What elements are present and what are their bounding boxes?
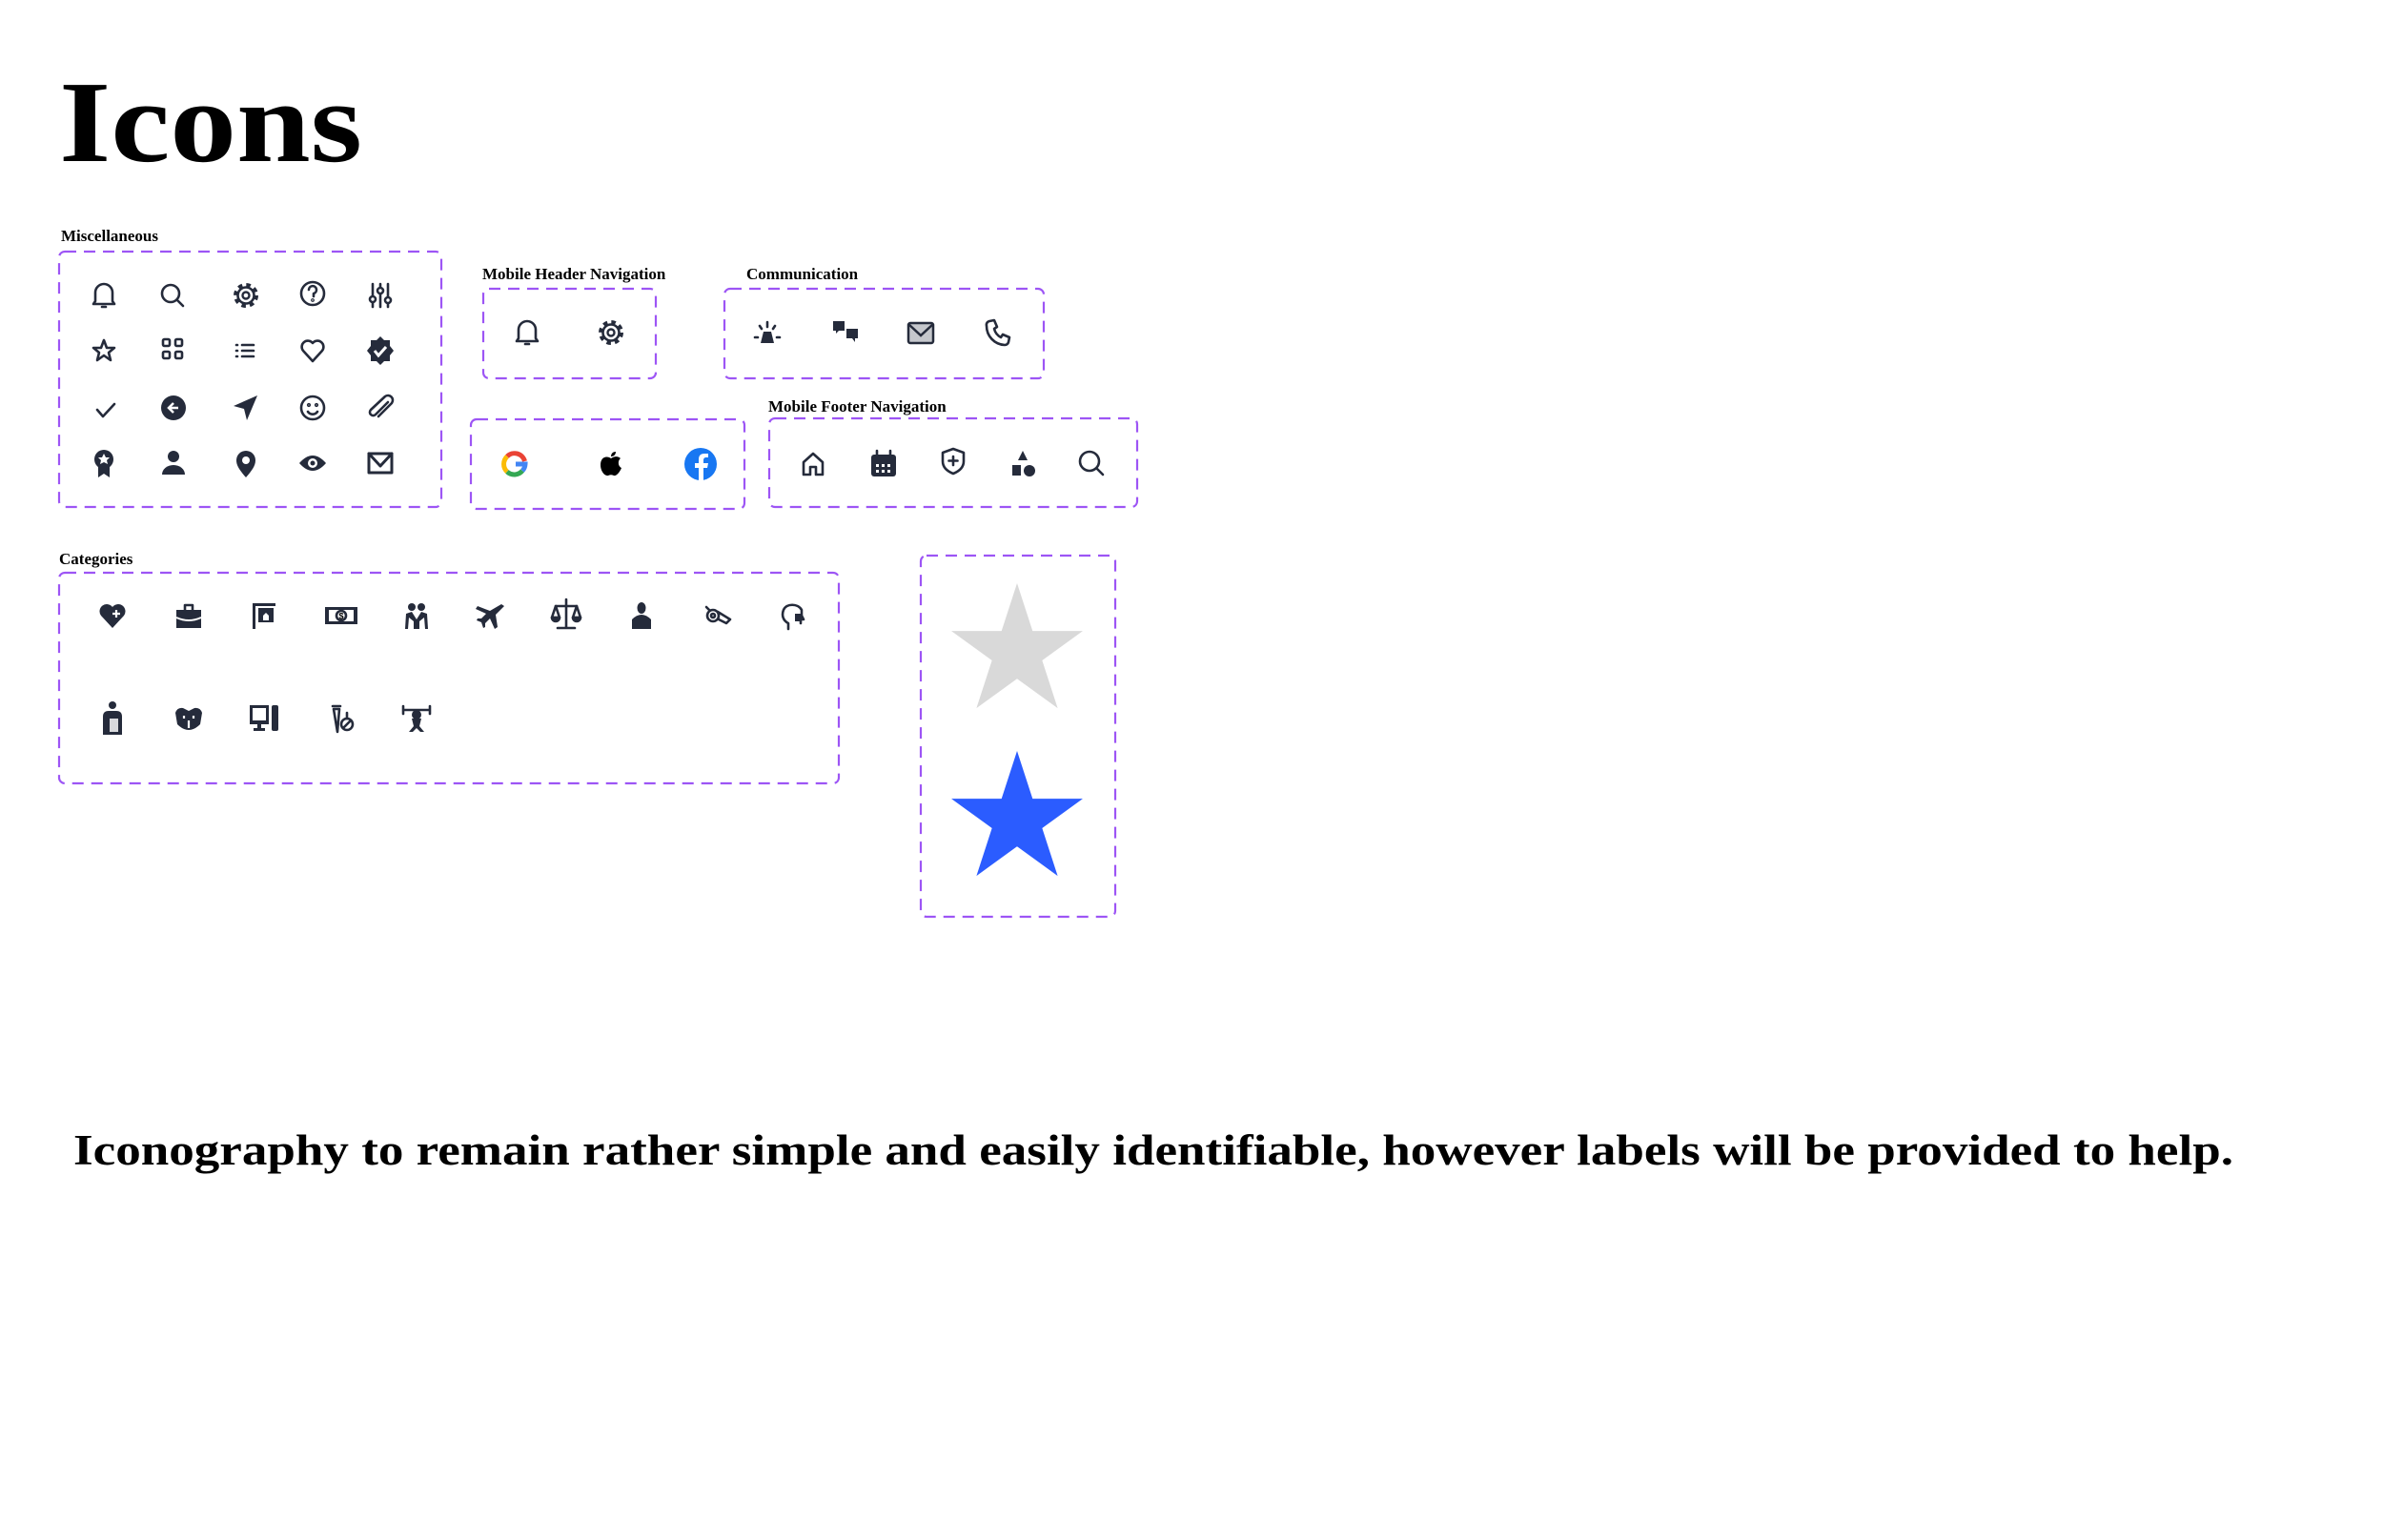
icon: mail — [369, 454, 392, 473]
icon: check — [97, 404, 114, 416]
icon: apple — [601, 452, 621, 476]
icon: phone — [987, 320, 1009, 345]
icon: paperclip — [370, 395, 393, 416]
icon: calendar — [871, 451, 896, 476]
icon: help — [301, 282, 324, 305]
icon: blue star — [951, 751, 1083, 876]
icon: envelope — [908, 323, 933, 343]
icon: chat — [833, 321, 858, 342]
panel: communication — [724, 265, 1044, 378]
title: Icons — [59, 58, 362, 187]
icon: shield — [943, 449, 964, 474]
icon: home — [804, 454, 823, 475]
icon: computer — [250, 705, 278, 731]
icon: list — [236, 345, 254, 356]
icon: grid — [163, 339, 182, 358]
panel: miscellaneous — [59, 227, 441, 507]
icon: verified badge — [367, 336, 394, 365]
icon: facebook — [684, 448, 717, 480]
icon: search — [162, 285, 183, 306]
icon: briefcase — [176, 605, 201, 628]
icon: back arrow — [161, 395, 186, 420]
icon: heart — [302, 341, 323, 361]
icon: community — [405, 603, 428, 629]
icon: real estate sign — [253, 603, 275, 629]
icon: nutrition — [333, 706, 353, 732]
panel: mobile header navigation — [482, 265, 666, 378]
icon: settings — [601, 322, 621, 343]
heading: miscellaneous: Miscellaneous — [61, 227, 158, 245]
icon: scales — [552, 599, 580, 628]
heading: communication: Communication — [746, 265, 859, 283]
icon: location — [236, 451, 255, 477]
panel: rating stars — [921, 556, 1115, 917]
icon: smiley — [301, 396, 324, 419]
icon: shapes — [1012, 451, 1035, 476]
icon: head brain — [783, 605, 804, 629]
icon: bell — [93, 284, 114, 307]
panel: mobile footer navigation — [768, 397, 1137, 507]
icon: person — [632, 602, 651, 629]
panel: social login — [471, 419, 744, 509]
icon: settings — [235, 285, 256, 306]
icon: anatomy — [103, 701, 122, 735]
icon: award — [94, 450, 113, 477]
icon: eye — [299, 456, 326, 471]
icon: gray star — [951, 583, 1083, 708]
caption: Iconography to remain rather simple and easily identifiable, however labels will be provided to help. — [73, 1126, 2233, 1174]
icon: alarm — [755, 322, 780, 343]
heading: mobile header navigation: Mobile Header Navigation — [482, 265, 666, 283]
icon: user — [162, 451, 185, 475]
icon: bell — [517, 321, 538, 344]
icon: fitness — [403, 706, 430, 732]
icon: google — [504, 454, 525, 475]
icon: money — [325, 607, 357, 624]
icon: search — [1080, 452, 1103, 475]
icon: health heart — [99, 604, 126, 628]
icon: airplane — [476, 604, 504, 629]
icon: money: $ — [338, 612, 344, 621]
icon: whistle — [706, 607, 730, 623]
heading: mobile footer navigation: Mobile Footer Navigation — [768, 397, 947, 415]
icon: pet — [175, 708, 202, 730]
heading: categories: Categories — [59, 550, 133, 568]
icon: star — [93, 340, 114, 360]
icon: send — [234, 395, 257, 420]
panel: categories — [59, 550, 839, 783]
icon: sliders — [370, 284, 391, 307]
